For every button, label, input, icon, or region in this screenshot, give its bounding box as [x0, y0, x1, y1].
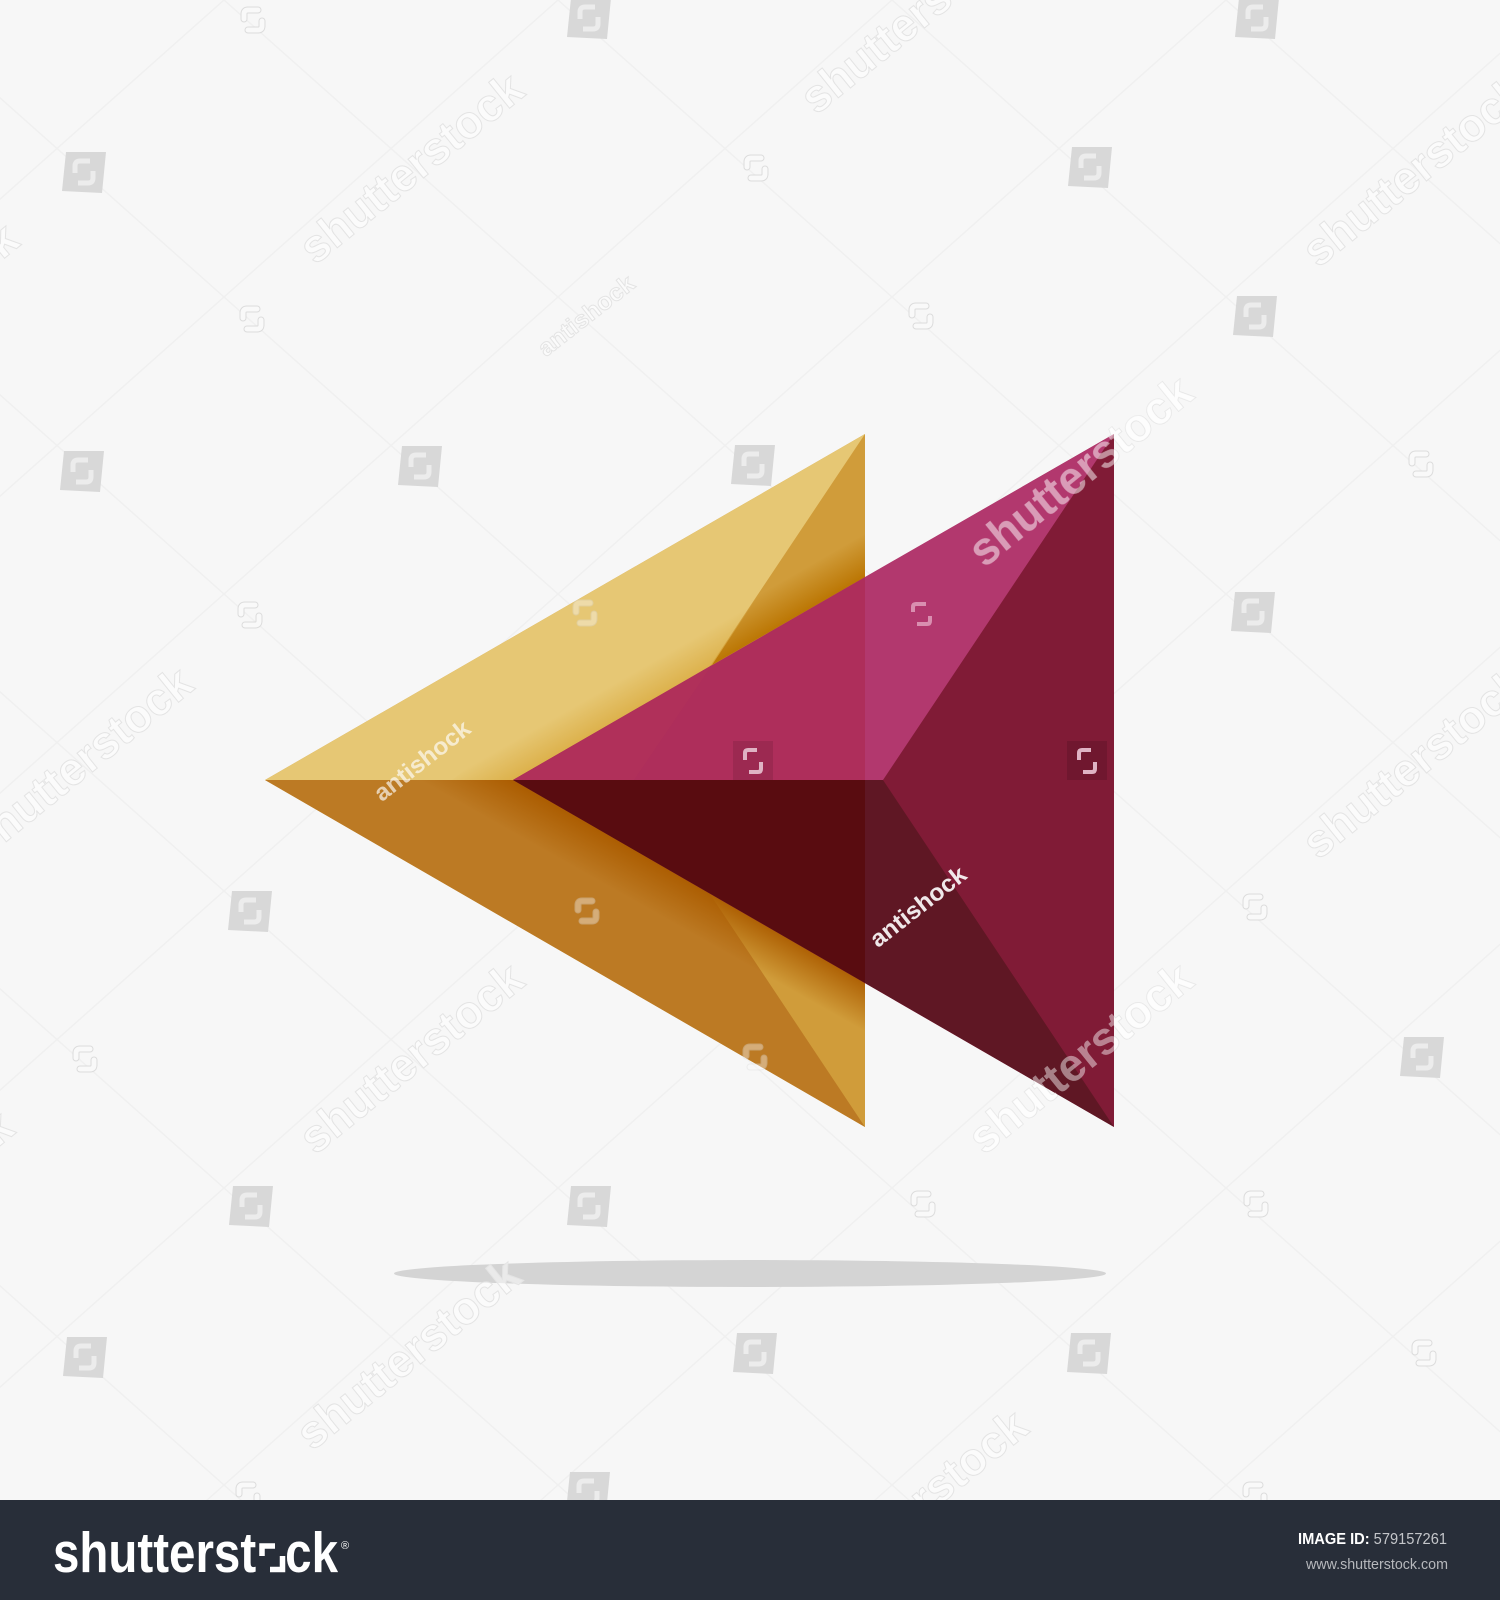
watermark text on background: shutterstock — [289, 952, 533, 1163]
magenta upper left facet — [513, 577, 865, 780]
watermark text on background: shutterstock — [289, 62, 533, 273]
watermark text on background: shutterstock — [286, 1248, 530, 1459]
watermark text on arrows: antishock — [369, 715, 477, 807]
image id: IMAGE ID: 579157261 — [1298, 1531, 1447, 1548]
magenta fold tint — [513, 665, 712, 780]
cast shadow on upper facet — [452, 570, 775, 780]
yellow watermark — [576, 603, 764, 1067]
ground shadow — [394, 1260, 1106, 1287]
yellow base — [265, 434, 865, 1127]
watermark text on arrows: shutterstock — [958, 365, 1202, 576]
footer bar — [0, 1500, 1500, 1600]
watermark text on background: shutterstock — [958, 952, 1202, 1163]
yellow lower facet — [265, 780, 865, 1127]
magenta lower right facet — [865, 780, 1114, 1127]
watermark text on background: shutterstock — [958, 365, 1202, 576]
yellow upper facet — [265, 434, 865, 780]
yellow arrow — [265, 434, 865, 1127]
watermark text on arrows — [369, 365, 1202, 1163]
magenta upper right facet — [865, 434, 1114, 780]
shutterstock logo: shutterstock — [53, 1521, 338, 1585]
shutterstock logo: ® — [341, 1540, 349, 1552]
watermark text on background: antishock — [533, 270, 641, 362]
magenta arrow — [513, 434, 1114, 1127]
watermark text on arrows: antishock — [865, 861, 973, 953]
magenta base — [513, 434, 1114, 1127]
watermark squares on magenta — [733, 604, 1107, 780]
cast shadow lower — [420, 780, 865, 1127]
watermark text on arrows: shutterstock — [958, 952, 1202, 1163]
cast shadow on upper right facet — [712, 434, 865, 665]
website: www.shutterstock.com — [1305, 1556, 1448, 1573]
magenta lower left facet — [513, 780, 865, 983]
